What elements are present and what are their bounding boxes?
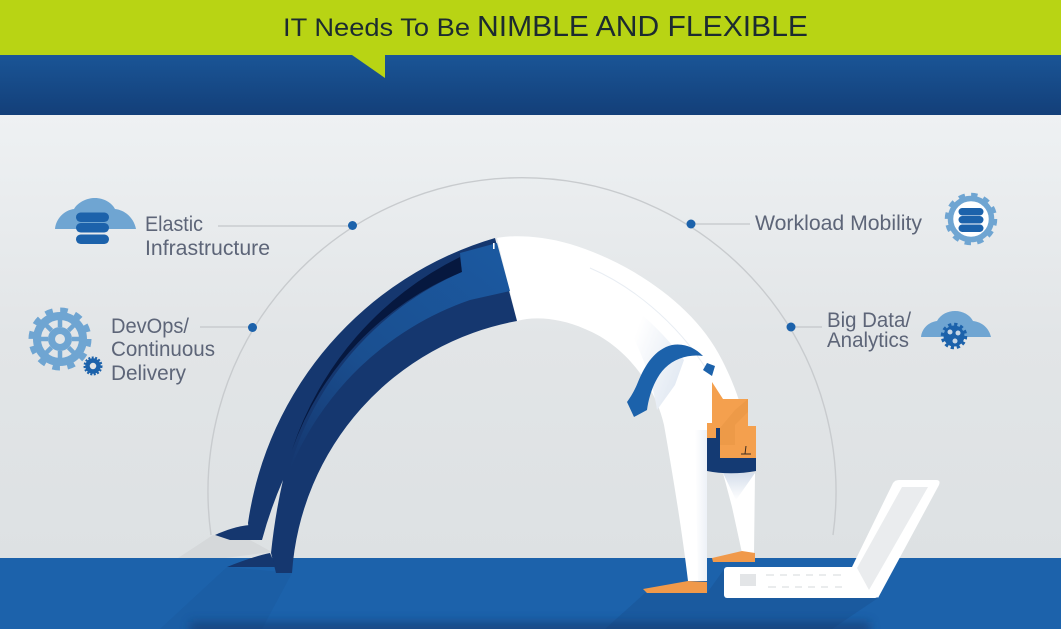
- back foot: [215, 525, 250, 540]
- leader line: [218, 225, 352, 227]
- front foot: [227, 553, 276, 567]
- background panel: [0, 115, 1061, 558]
- keyboard keys: [766, 575, 842, 587]
- icon: cloud with gear: [921, 311, 991, 348]
- front shoe: [643, 581, 707, 593]
- black stripe: [292, 257, 462, 450]
- leader line: [200, 326, 252, 328]
- trousers: [215, 238, 517, 573]
- callout: DevOps / Continuous Delivery: [32, 310, 257, 385]
- tie knot: [703, 363, 715, 376]
- glasses mark: [741, 446, 751, 454]
- front arm shading: [695, 430, 707, 581]
- label: Big Data/: [827, 309, 911, 332]
- floor and wall shadows: [160, 535, 878, 629]
- back arm shade: [723, 473, 755, 500]
- shirt torso and front arm: [497, 236, 750, 581]
- laptop: [724, 480, 940, 598]
- collar / hair: [707, 428, 756, 473]
- dot: [786, 322, 796, 332]
- head shading: [720, 399, 748, 445]
- label: Continuous: [111, 338, 215, 361]
- shirt shading: [610, 295, 684, 410]
- leader line: [691, 223, 750, 225]
- label: Workload Mobility: [755, 212, 922, 235]
- label: Infrastructure: [145, 237, 270, 260]
- back arm: [723, 473, 755, 553]
- laptop base: [724, 567, 878, 598]
- dot: [248, 323, 257, 332]
- blue highlight band: [288, 243, 510, 475]
- icon: small gear: [84, 358, 102, 374]
- title: NIMBLE AND FLEXIBLE: [477, 11, 808, 43]
- laptop display: [857, 487, 928, 590]
- figure: bending businessperson: [497, 236, 756, 593]
- icon: cloud with server stack: [55, 198, 136, 244]
- label: Elastic: [145, 213, 203, 236]
- back shoe: [712, 551, 755, 562]
- label: Analytics: [827, 329, 909, 352]
- callout: Elastic Infrastructure: [55, 198, 357, 260]
- dot: [348, 221, 357, 230]
- laptop screen: [852, 480, 940, 598]
- trouser silhouette: [248, 238, 517, 573]
- dot: [686, 220, 696, 228]
- icon: large gear: [32, 310, 88, 368]
- tie: [627, 345, 703, 417]
- label: Delivery: [111, 362, 186, 385]
- trackpad: [740, 574, 756, 586]
- blue header band: [0, 55, 1061, 115]
- title: IT Needs To Be: [283, 14, 470, 42]
- green title banner with speech pointer: [0, 0, 1061, 78]
- shirt fold line: [590, 268, 707, 370]
- leader line: [791, 326, 822, 328]
- belt tick: [493, 243, 495, 249]
- icon: gear with server stack: [948, 196, 994, 242]
- semicircular arc: [208, 178, 836, 535]
- label: DevOps/: [111, 315, 189, 338]
- callout: Workload Mobility: [686, 196, 994, 242]
- callout: Big Data / Analytics: [786, 309, 991, 352]
- blue floor: [0, 558, 1061, 629]
- head and hands: [707, 382, 756, 458]
